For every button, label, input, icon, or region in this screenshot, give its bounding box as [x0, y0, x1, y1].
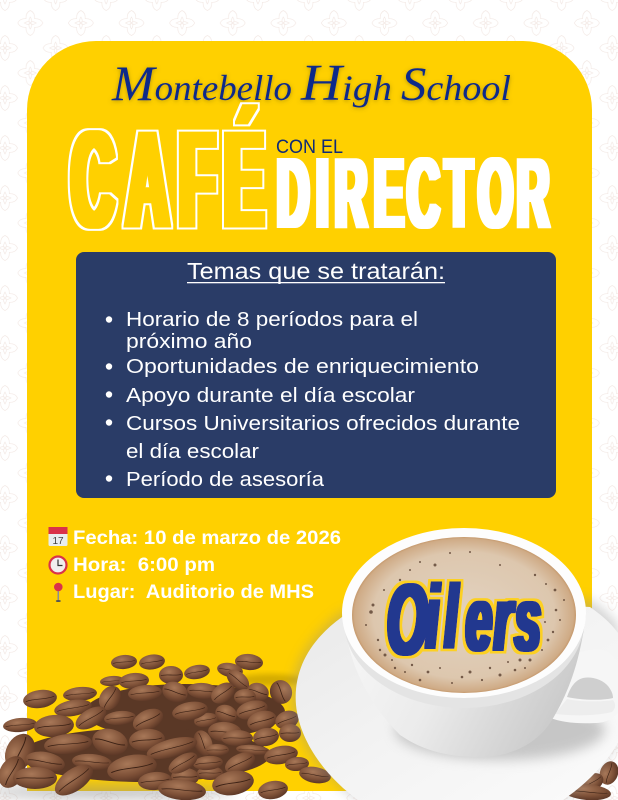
panel: topics: [76, 252, 556, 498]
topics list: Cursos Universitarios ofrecidos durante: [126, 412, 520, 435]
place: Lugar: Auditorio de MHS: [73, 581, 314, 603]
cup rim: [342, 528, 586, 698]
title: school name: School: [401, 58, 511, 111]
cup rim band: [344, 534, 584, 708]
icon: map pin: [54, 583, 63, 602]
heading: DIRECTOR: DIRECTOR: [277, 139, 549, 249]
heading: CON EL: CON EL: [276, 137, 343, 158]
cup body: [343, 615, 586, 757]
icon: coffee cup and saucer: [292, 528, 618, 800]
title: school name: High: [300, 55, 392, 112]
icon: clock: [50, 556, 66, 574]
topics list: Horario de 8 períodos para el: [126, 308, 418, 331]
cup handle: [550, 650, 618, 723]
topics list: Apoyo durante el día escolar: [126, 384, 415, 407]
topics list: [106, 308, 520, 491]
beans: lower right: [562, 759, 618, 800]
title: school name: [111, 55, 511, 112]
title: school name: Montebello: [111, 55, 292, 111]
topics heading: Temas que se tratarán:: [187, 258, 445, 284]
heading: CAFÉ outlined: CAFÉ: [71, 102, 264, 257]
topics list: próximo año: [126, 330, 252, 353]
topics list: Período de asesoría: [126, 468, 325, 491]
topics list: Oportunidades de enriquecimiento: [126, 355, 479, 378]
Oilers logo: Oilers: [387, 564, 541, 675]
coffee foam: [352, 537, 576, 693]
date: Fecha: 10 de marzo de 2026: [73, 527, 341, 549]
event details: [48, 527, 341, 603]
coffee beans: [0, 653, 332, 800]
saucer shadow: [292, 592, 618, 798]
topics list: el día escolar: [126, 440, 259, 463]
icon: calendar: [48, 527, 68, 547]
icon: calendar: 17: [52, 536, 64, 547]
cup shadow on saucer: [395, 700, 605, 760]
time: Hora: 6:00 pm: [73, 554, 215, 576]
saucer: [296, 600, 618, 800]
shadow beneath beans: [0, 785, 235, 799]
